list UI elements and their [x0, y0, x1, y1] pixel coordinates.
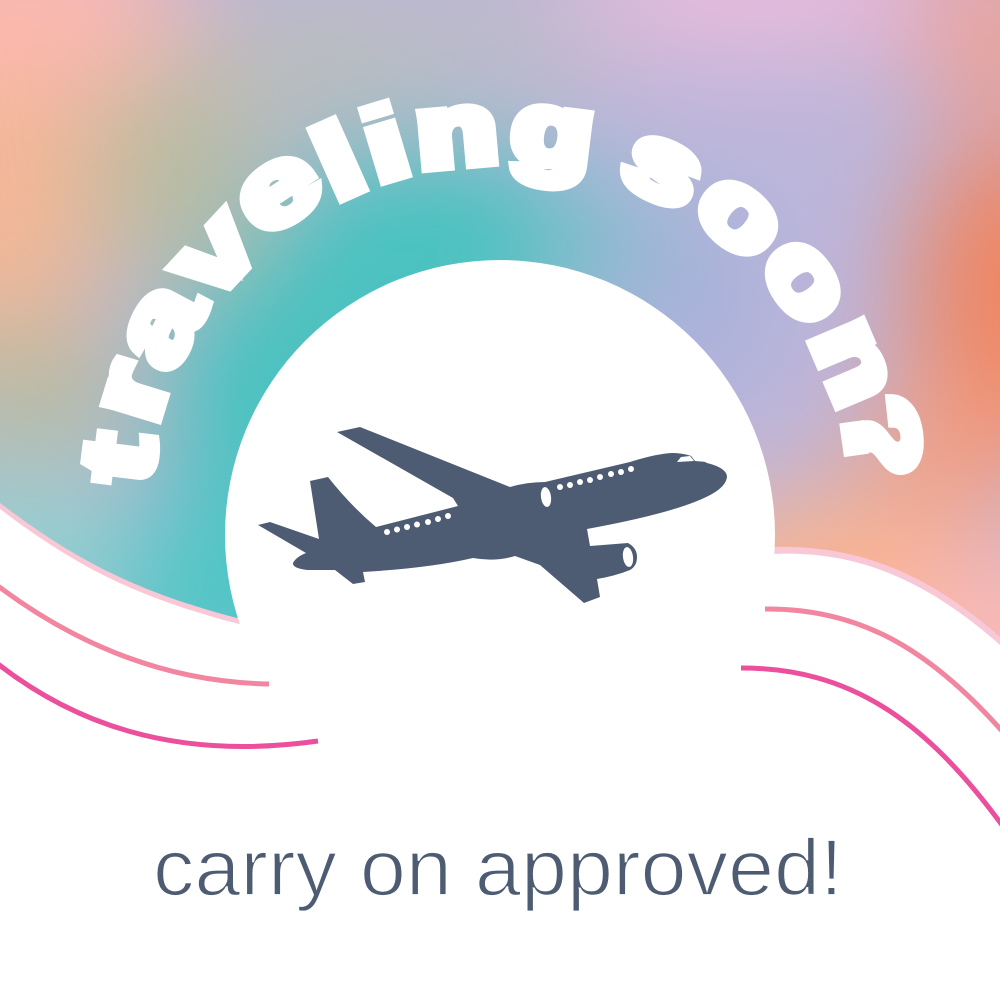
left pink swoosh — [0, 586, 269, 684]
curved title: traveling soon?: i — [346, 81, 425, 208]
curved title: traveling soon? — [60, 69, 943, 486]
curved title: traveling soon?: l — [299, 102, 378, 220]
curved title: traveling soon?: e — [210, 116, 341, 258]
white circle — [225, 260, 775, 810]
curved title: traveling soon?: s — [609, 98, 722, 230]
left magenta swoosh — [0, 664, 318, 747]
gradient background — [0, 0, 1000, 637]
subtitle: carry on approved! — [153, 823, 843, 912]
right magenta swoosh — [741, 668, 1000, 825]
white lower area — [0, 509, 1000, 1000]
airplane silhouette — [258, 427, 727, 603]
curved title: traveling soon?: o — [677, 144, 809, 280]
curved title: traveling soon?: v — [143, 184, 282, 321]
curved title: traveling soon?: o — [740, 213, 878, 342]
curved title: traveling soon?: g — [507, 69, 599, 190]
curved title: traveling soon?: t — [60, 430, 176, 486]
curved title: traveling soon?: a — [86, 260, 229, 385]
right pink swoosh — [765, 609, 1000, 731]
airplane — [258, 427, 727, 603]
curved title: traveling soon?: n — [790, 302, 924, 419]
curved title: traveling soon?: ? — [821, 390, 943, 484]
curved title: traveling soon?: n — [412, 70, 501, 189]
pink edge band — [0, 503, 1000, 660]
airplane windows — [384, 456, 707, 568]
curved title: traveling soon?: r — [68, 350, 190, 431]
